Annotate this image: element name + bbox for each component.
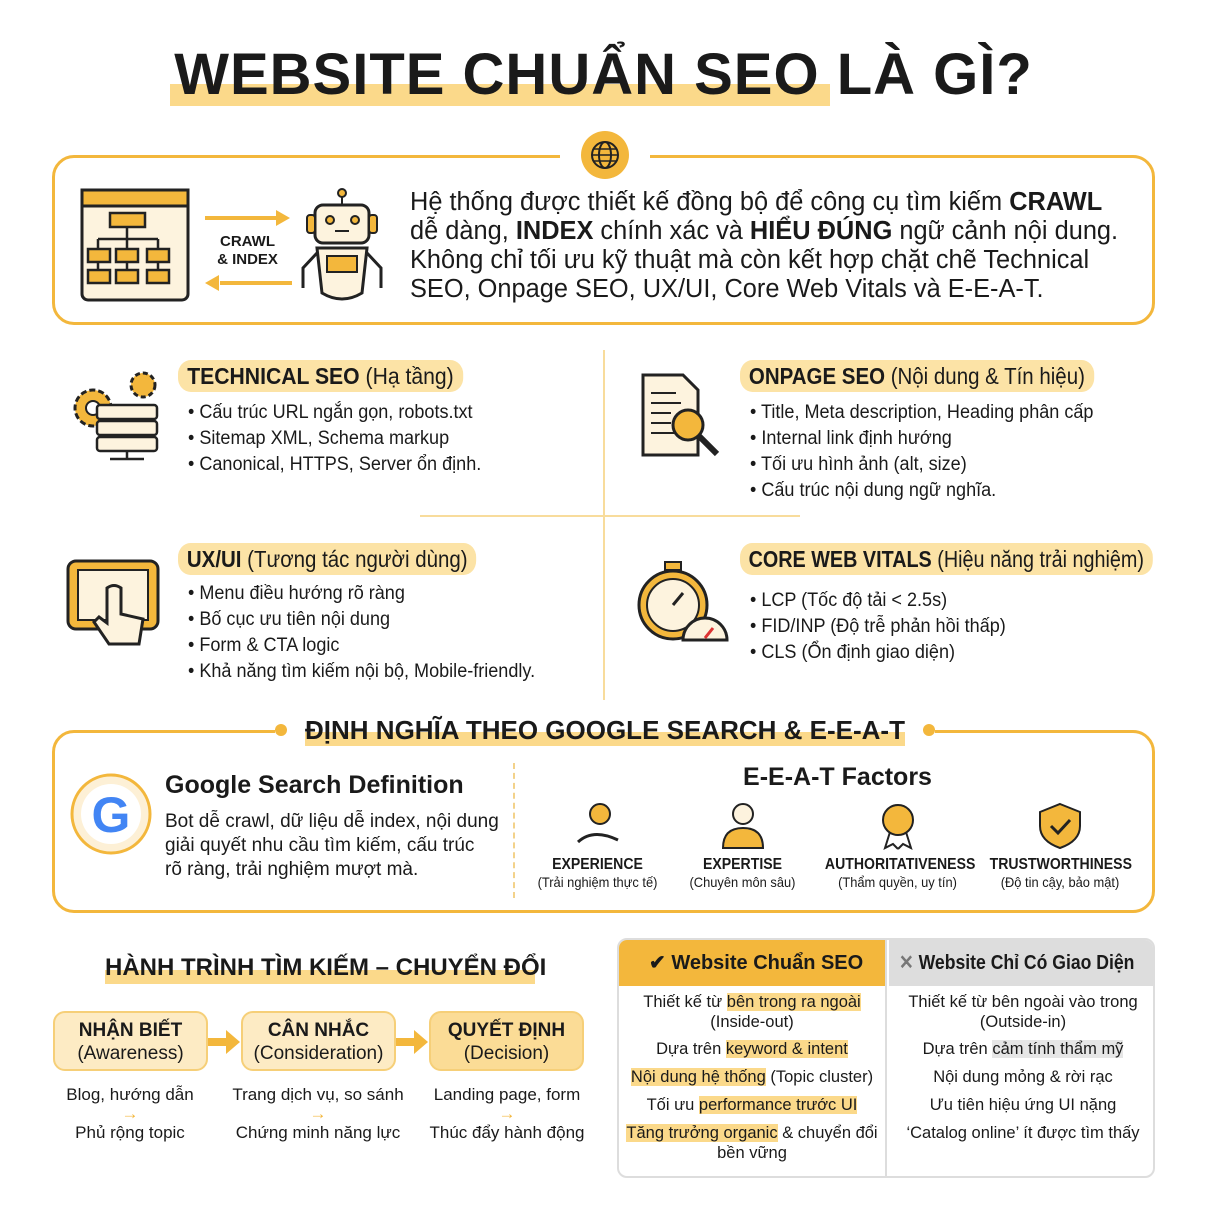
bullets [750,402,1093,501]
column: chỉ có giao diện: ‘Catalog online’ ít được tìm thấy [906,1124,1140,1142]
column: chỉ có giao diện: (Outside-in) [980,1013,1066,1031]
icon: authoritativeness: (Thẩm quyền, uy tín) [838,874,957,890]
arrows: crawl & index: CRAWL [220,233,275,250]
icon: tablet touch [66,560,160,646]
heading: UX/UI (Tương tác người dùng) [187,546,468,572]
column: chuẩn seo: Thiết kế từ bên trong ra ngoài [643,993,861,1011]
icon: server gears [74,372,158,460]
icon: document search [642,374,720,456]
column: chuẩn seo: bền vững [717,1144,787,1162]
arrows: crawl & index [205,210,292,291]
column: chỉ có giao diện: Ưu tiên hiệu ứng UI nặng [930,1096,1116,1114]
eeat factors: E-E-A-T Factors [743,763,932,791]
bullets [188,401,481,475]
stage: awareness: (Awareness) [77,1043,184,1064]
column: chỉ có giao diện: Dựa trên cảm tính thẩm mỹ [923,1040,1123,1058]
dividers [603,350,605,700]
icon: website sitemap [80,188,190,302]
icon: authoritativeness [825,804,975,890]
stage: decision: QUYẾT ĐỊNH [448,1020,565,1041]
sub text: → [122,1104,138,1123]
sub text [66,1085,194,1142]
text: google definition [165,771,499,880]
arrows: crawl & index: & INDEX [217,251,278,268]
panel: technical seo [74,360,481,475]
icon: experience [538,803,657,890]
column: chuẩn seo: ✔ Website Chuẩn SEO [649,952,863,974]
icon: robot [302,188,382,300]
text: intro description: dễ dàng, INDEX chính xác và HIỂU ĐÚNG ngữ cảnh nội dung. [410,217,1118,245]
bullets: Cấu trúc URL ngắn gọn, robots.txt [199,402,473,423]
bullets: FID/INP (Độ trễ phản hồi thấp) [761,616,1006,637]
text: google definition: giải quyết nhu cầu tìm kiếm, cấu trúc [165,835,474,856]
column: chỉ có giao diện: Thiết kế từ bên ngoài vào trong [908,993,1138,1011]
column: chuẩn seo: (Inside-out) [710,1013,794,1031]
text: intro description: SEO, Onpage SEO, UX/UI, Core Web Vitals và E-E-A-T. [410,275,1044,303]
icon: expertise: EXPERTISE [703,856,782,873]
bullets: Khả năng tìm kiếm nội bộ, Mobile-friendly. [199,661,535,682]
bullets: CLS (Ổn định giao diện) [761,642,955,663]
heading: google & eeat: ĐỊNH NGHĨA THEO GOOGLE SEARCH & E-E-A-T [305,715,905,745]
stage: decision [429,1011,584,1071]
column: chuẩn seo: Nội dung hệ thống (Topic cluster) [631,1068,873,1086]
bullets [188,583,535,682]
panel: google & eeat [52,730,1155,913]
column: chuẩn seo: Tối ưu performance trước UI [647,1096,857,1114]
comparison table [617,938,1155,1178]
icon: experience: EXPERIENCE [552,856,643,873]
text: google definition: Bot dễ crawl, dữ liệu dễ index, nội dung [165,811,499,832]
icon: stopwatch [638,561,728,642]
column: chuẩn seo: Dựa trên keyword & intent [656,1040,848,1058]
column: chỉ có giao diện [889,940,1153,1142]
bullets [750,590,1006,663]
icon: expertise: (Chuyên môn sâu) [690,874,795,890]
panel: customer journey: Trang dịch vụ, so sánh [232,1085,404,1104]
bullets: Title, Meta description, Heading phân cấp [761,402,1093,423]
column: chỉ có giao diện: Nội dung mỏng & rời rạc [933,1068,1113,1086]
column: chuẩn seo: Tăng trưởng organic & chuyển đổi [626,1124,878,1142]
panel: customer journey: Thúc đẩy hành động [429,1123,584,1142]
panel: onpage seo [642,360,1094,501]
sub text: Phủ rộng topic [75,1123,185,1142]
text: google definition: Google Search Definition [165,771,464,799]
icon: trustworthiness: TRUSTWORTHINESS [990,856,1132,873]
heading: CORE WEB VITALS (Hiệu năng trải nghiệm) [749,546,1144,572]
heading: ONPAGE SEO (Nội dung & Tín hiệu) [749,363,1085,389]
title: WEBSITE CHUẨN SEO LÀ GÌ? [174,42,1033,107]
icon: google [70,774,152,854]
icon: expertise [690,803,795,890]
text: intro description: Không chỉ tối ưu kỹ thuật mà còn kết hợp chặt chẽ Technical [410,246,1089,274]
stage: consideration: (Consideration) [254,1043,383,1064]
column: chỉ có giao diện: ✕ Website Chỉ Có Giao Diện [899,952,1134,974]
panel: customer journey [53,953,584,1142]
stage: decision: (Decision) [464,1043,549,1064]
bullets: Bố cục ưu tiên nội dung [199,609,390,630]
bullets: Menu điều hướng rõ ràng [199,583,405,604]
icon: trustworthiness [990,802,1132,890]
heading: HÀNH TRÌNH TÌM KIẾM – CHUYỂN ĐỔI [105,954,546,981]
stage: awareness: NHẬN BIẾT [79,1020,182,1041]
stage: consideration [241,1011,396,1071]
bullets: Sitemap XML, Schema markup [199,428,449,449]
bullets: Internal link định hướng [761,428,952,449]
icon: trustworthiness: (Độ tin cậy, bảo mật) [1001,874,1119,890]
arrow [208,1030,240,1054]
column: chuẩn seo [619,940,887,1180]
panel: intro [52,155,1155,325]
sub text: Blog, hướng dẫn [66,1085,194,1104]
text: google definition: rõ ràng, trải nghiệm mượt mà. [165,859,418,880]
icon: authoritativeness: AUTHORITATIVENESS [825,856,975,873]
icon: google: G [92,787,130,843]
text: intro description: Hệ thống được thiết kế đồng bộ để công cụ tìm kiếm CRAWL [410,188,1102,216]
bullets: Canonical, HTTPS, Server ổn định. [199,454,481,475]
panel: core web vitals [638,543,1153,663]
panel: customer journey: → [310,1104,326,1123]
bullets: Cấu trúc nội dung ngữ nghĩa. [761,480,996,501]
text: intro description [410,188,1118,303]
icon: globe [560,130,650,180]
bullets: Tối ưu hình ảnh (alt, size) [761,454,967,475]
icon: experience: (Trải nghiệm thực tế) [538,874,657,890]
panel: customer journey: Chứng minh năng lực [236,1123,400,1142]
heading: TECHNICAL SEO (Hạ tầng) [187,363,454,389]
stage: awareness [53,1011,208,1071]
bullets: Form & CTA logic [199,635,339,656]
bullets: LCP (Tốc độ tải < 2.5s) [761,590,947,611]
panel: ux/ui [66,543,535,682]
panel: customer journey: → [498,1104,516,1123]
panel: customer journey: Landing page, form [434,1085,580,1104]
stage: consideration: CÂN NHẮC [268,1020,369,1041]
eeat factors [538,763,1132,890]
